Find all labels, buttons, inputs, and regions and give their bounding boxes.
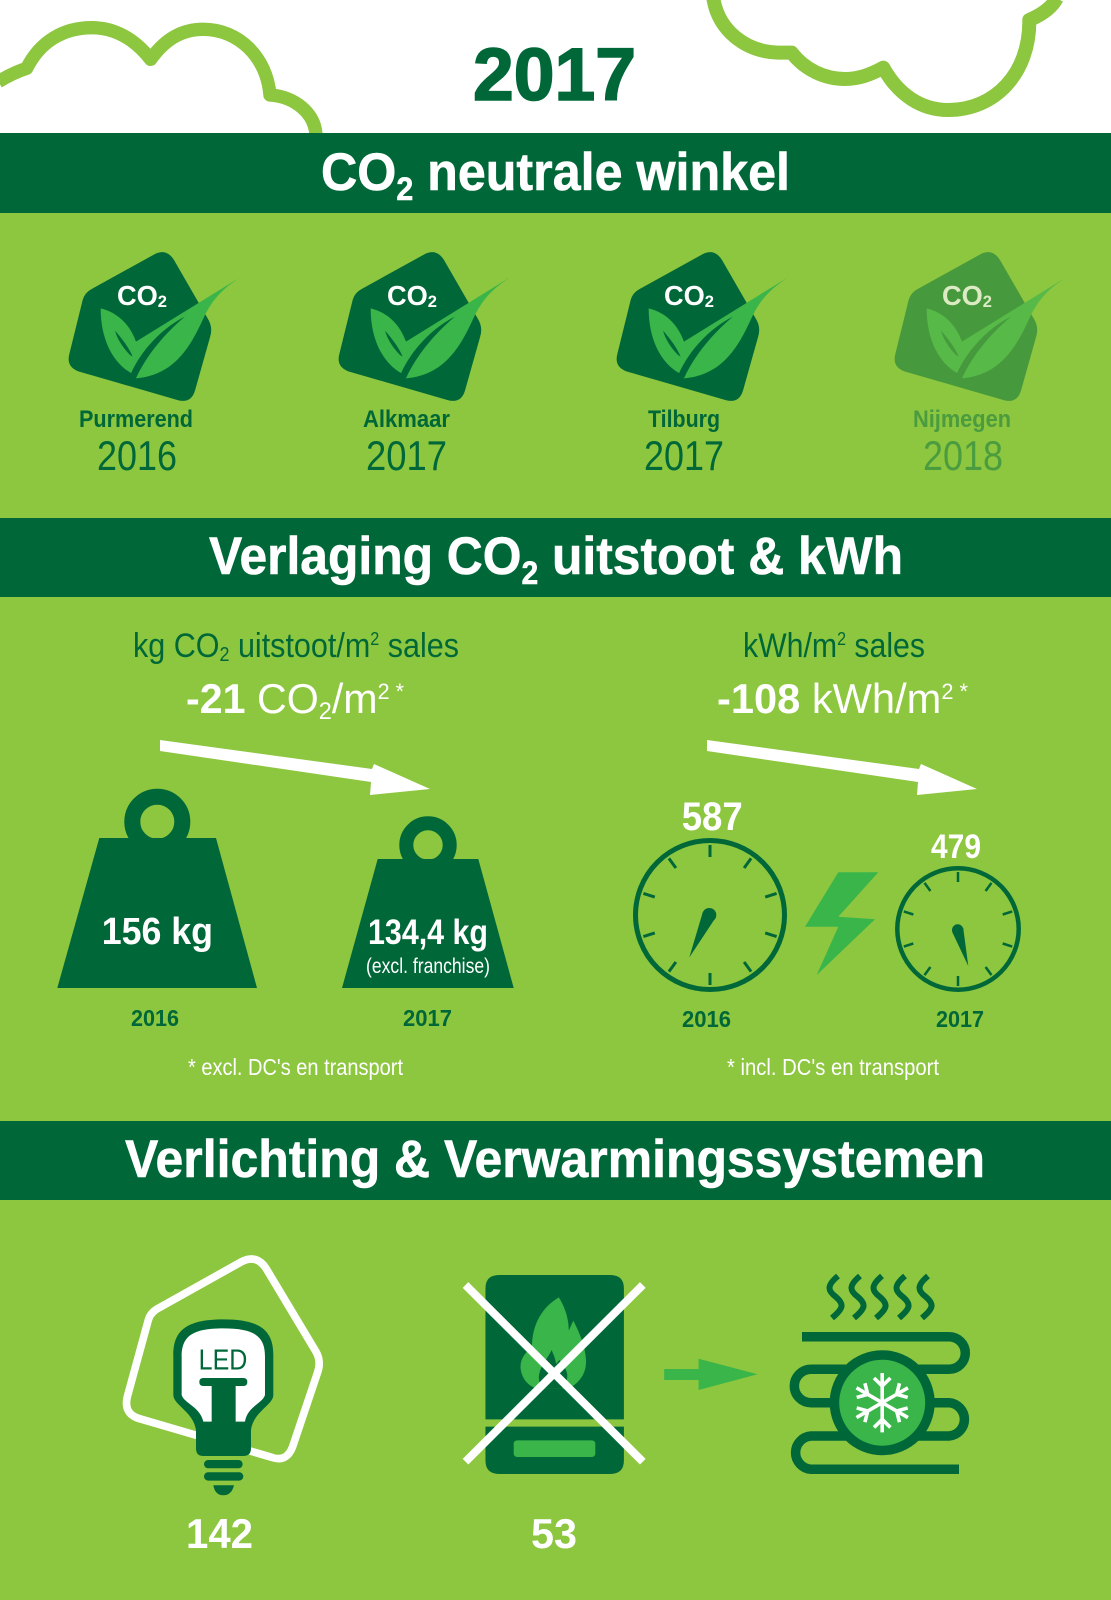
section heading: CO2 neutrale winkel: 2 [396,171,413,207]
footnote: kWh: * incl. DC's en transport [727,1054,940,1080]
year label: gauge 2017: 2017 [936,1006,984,1032]
badge: Alkmaar 2017: CO [387,280,429,311]
badge: Purmerend 2016 [69,252,240,479]
arrow: boiler to heat pump [664,1359,758,1390]
section heading: Verlaging CO2 uitstoot & kWh: 2 [521,555,538,591]
subheading: kg CO2 per m2: uitstoot/m [229,627,370,665]
value: 53: 53 [531,1510,577,1557]
badge: Purmerend 2016: CO [117,280,159,311]
reduction value: CO2: 2 [319,698,332,725]
badge: Tilburg 2017: Tilburg [648,406,720,433]
weight: 2017 [342,823,514,988]
subheading: kg CO2 per m2: 2 [370,629,379,649]
value: 479: 479 [931,828,981,866]
badge: Alkmaar 2017: 2017 [366,432,447,479]
gauge: 2016 [636,840,784,990]
badge: Nijmegen 2018 (faded): 2 [983,292,992,311]
section heading: Verlichting & Verwarmingssystemen [0,1121,1111,1200]
section heading: Verlaging CO2 uitstoot & kWh: uitstoot & kWh [538,527,903,586]
reduction value: CO2: -21 CO [186,675,320,722]
title: 2017 [473,33,636,116]
year label: weight 2017: 2017 [403,1005,452,1031]
weight: 2016 [57,797,257,988]
subheading: kg CO2 per m2: 2 [219,644,229,666]
badge: Nijmegen 2018 (faded): Nijmegen [913,406,1011,433]
badge: Nijmegen 2018 (faded) [895,252,1066,479]
badge: Tilburg 2017: CO [664,280,706,311]
badge: Purmerend 2016: 2 [158,292,167,311]
icon: crossed-out boiler [466,1275,643,1474]
cloud outline left [0,28,316,135]
subheading: kg CO2 per m2: sales [379,627,459,665]
section heading: CO2 neutrale winkel: CO [321,143,400,202]
section heading: Verlaging CO2 uitstoot & kWh [0,518,1111,597]
icon: LED bulb in house outline [126,1259,319,1495]
weight: 2017: (excl. franchise) [366,955,490,978]
footnote: CO2: * excl. DC's en transport [188,1054,404,1080]
subheading: kWh per m2: kWh/m [743,627,849,665]
value: 587: 587 [682,795,743,839]
badge: Tilburg 2017: 2 [705,292,714,311]
gauge: 2017 [897,868,1019,990]
badge: Alkmaar 2017 [339,252,510,479]
weight: 2016: 156 kg [102,911,213,953]
badge: Nijmegen 2018 (faded): CO [942,280,984,311]
subheading: kg CO2 per m2: kg CO [133,627,229,665]
subheading: kWh per m2: sales [846,627,925,665]
section heading: CO2 neutrale winkel [0,133,1111,213]
year label: gauge 2016: 2016 [682,1006,731,1032]
reduction value: CO2: /m [332,675,378,722]
badge: Alkmaar 2017: Alkmaar [363,406,450,433]
badge: Tilburg 2017: 2017 [644,432,724,479]
badge: Nijmegen 2018 (faded): 2018 [923,432,1003,479]
year label: weight 2016: 2016 [131,1005,179,1031]
reduction value: kWh: -108 kWh/m [717,675,943,722]
value: 142: 142 [186,1510,253,1557]
icon: heating and cooling coil [794,1276,965,1469]
section heading: Verlichting & Verwarmingssystemen: Verlichting & Verwarmingssystemen [125,1130,985,1189]
badge: Purmerend 2016: 2016 [97,432,177,479]
arrow: CO2 decrease [160,740,430,795]
section heading: Verlaging CO2 uitstoot & kWh: Verlaging CO [209,527,542,586]
icon: lightning bolt [805,872,878,975]
arrow: kWh decrease [707,740,977,795]
badge: Tilburg 2017 [617,252,788,479]
reduction value: kWh: 2 * [941,679,968,704]
section heading: CO2 neutrale winkel: neutrale winkel [413,143,790,202]
subheading: kWh per m2: 2 [837,629,846,649]
reduction value: CO2: 2 * [378,679,404,704]
badge: Alkmaar 2017: 2 [428,292,437,311]
cloud outline right [713,0,1057,110]
weight: 2017: 134,4 kg [368,913,488,952]
badge: Purmerend 2016: Purmerend [79,406,193,433]
icon: LED bulb in house outline: LED [199,1344,247,1376]
